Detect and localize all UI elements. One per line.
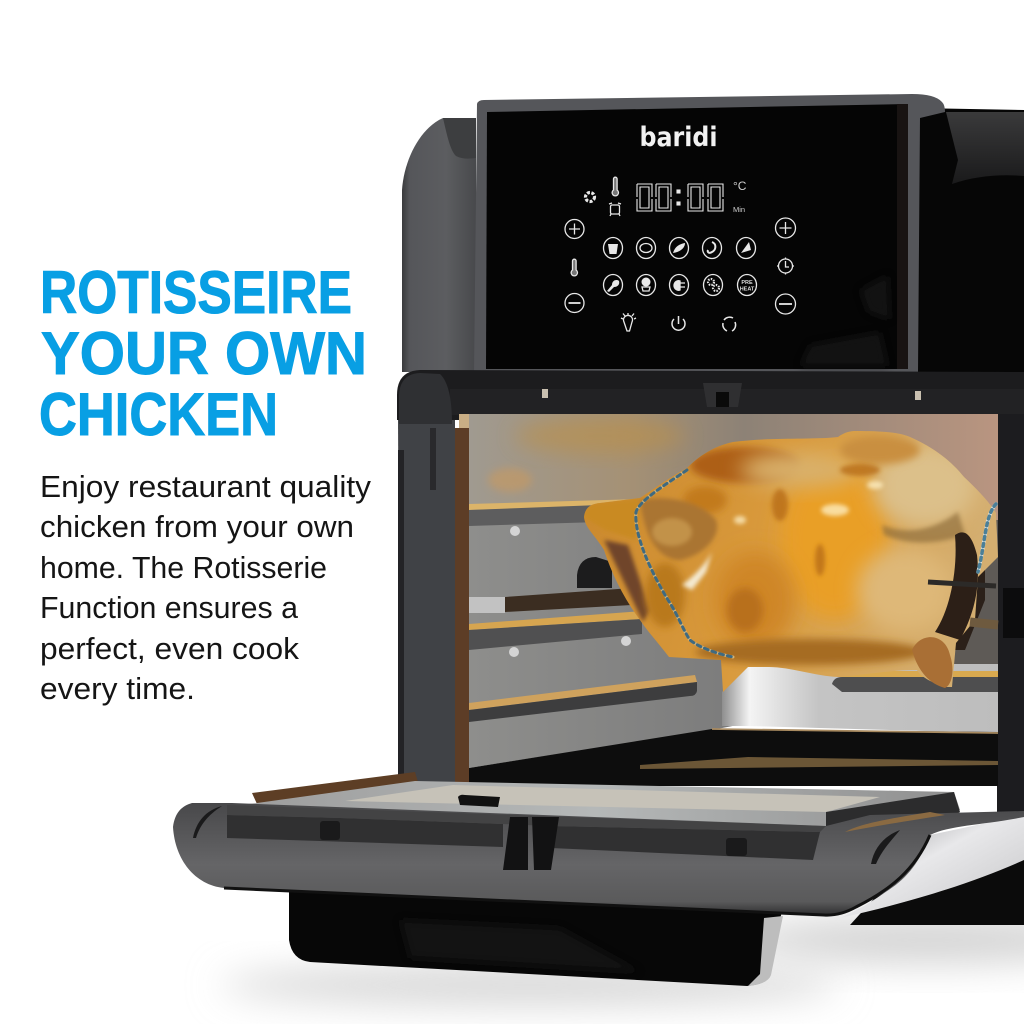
warm glow xyxy=(515,418,685,454)
panel edge strip xyxy=(897,104,908,369)
body text: Function ensures a xyxy=(40,591,298,625)
right side housing xyxy=(916,108,1024,372)
open door xyxy=(173,772,1024,915)
body text: perfect, even cook xyxy=(40,632,300,666)
rail three xyxy=(469,675,697,722)
light icon xyxy=(621,313,636,331)
chicken xyxy=(584,431,998,692)
band clips xyxy=(320,821,747,856)
left housing notch xyxy=(443,118,476,159)
rotate icon xyxy=(723,317,736,331)
handle silver edge xyxy=(748,916,783,986)
column edge xyxy=(398,450,404,780)
door glass highlight xyxy=(345,785,880,812)
oven interior xyxy=(469,414,998,790)
chicken drumstick xyxy=(912,637,952,688)
back wall xyxy=(722,664,998,733)
control panel glass xyxy=(486,104,908,369)
door dark band xyxy=(227,815,820,860)
timer digits xyxy=(637,184,723,211)
right column slot xyxy=(1003,588,1024,638)
right silver door panel xyxy=(840,815,1024,918)
glow spot xyxy=(488,468,532,492)
left plus button xyxy=(565,220,584,238)
right housing reflection xyxy=(946,112,1024,184)
door right highlight xyxy=(845,812,945,832)
left minus button xyxy=(565,294,584,312)
rail screws xyxy=(509,526,631,657)
beige corner tab xyxy=(459,414,470,428)
body text: chicken from your own xyxy=(40,510,354,544)
tray xyxy=(469,729,998,790)
body text: home. The Rotisserie xyxy=(40,551,327,585)
top frame bar xyxy=(397,370,1024,420)
handle black glass xyxy=(289,880,783,986)
unit labels: °C xyxy=(733,179,747,193)
left thermometer xyxy=(571,259,578,276)
left side housing xyxy=(402,118,476,372)
door right edge piece xyxy=(826,792,960,830)
column groove xyxy=(430,428,436,490)
body text: Enjoy restaurant quality xyxy=(40,470,372,504)
preset row two: PRE xyxy=(741,280,753,286)
heading: ROTISSEIRE xyxy=(40,259,352,326)
column corner xyxy=(399,373,452,424)
door inner tray xyxy=(230,781,960,826)
center notch xyxy=(503,817,559,870)
oven door frame xyxy=(397,370,1024,814)
spit bar xyxy=(469,588,632,613)
door bottom edge xyxy=(224,835,930,915)
alarm icon xyxy=(609,203,621,216)
heading: CHICKEN xyxy=(39,381,278,448)
panel reflections xyxy=(800,275,890,366)
chicken body xyxy=(584,431,998,692)
right door column xyxy=(997,414,1024,814)
heading: YOUR OWN xyxy=(41,320,367,387)
fan icon xyxy=(586,192,594,202)
right underside shadow xyxy=(850,840,1024,925)
chicken leg back xyxy=(945,535,985,650)
power icon xyxy=(672,316,685,330)
chicken cavity xyxy=(935,532,978,640)
control panel frame xyxy=(474,94,945,372)
frame latch xyxy=(703,383,742,407)
chicken skin shading xyxy=(584,436,977,665)
motor knob xyxy=(577,557,612,588)
preset row one xyxy=(604,238,756,258)
brand logo: baridi xyxy=(640,122,718,153)
right door slot xyxy=(871,830,900,864)
unit labels: Min xyxy=(733,205,745,214)
heading xyxy=(39,259,367,448)
rail one xyxy=(469,499,640,526)
body text: every time. xyxy=(40,672,195,706)
far wall behind chicken xyxy=(954,520,998,664)
body text xyxy=(40,470,372,706)
right clock xyxy=(777,258,794,274)
frame pins xyxy=(542,389,921,400)
door upper ridge xyxy=(227,805,826,832)
skewer right xyxy=(928,582,998,625)
right plus button xyxy=(776,218,796,238)
right minus button xyxy=(776,294,796,314)
door front moulding xyxy=(173,803,1024,915)
lower handle xyxy=(289,880,783,986)
preset row two xyxy=(604,274,756,296)
air fryer upper body xyxy=(402,94,1024,372)
door handle clip xyxy=(458,795,500,807)
back rail xyxy=(832,671,998,692)
latch slot xyxy=(716,392,729,407)
brown door edge xyxy=(252,772,418,804)
upper wall xyxy=(469,414,998,524)
brown inner strip xyxy=(455,428,469,784)
handle reflection xyxy=(400,920,640,972)
left door slot xyxy=(193,806,222,838)
thermometer icon top xyxy=(612,177,619,196)
floor shadow xyxy=(220,916,1024,1005)
rail two xyxy=(469,611,642,650)
twine xyxy=(636,470,996,657)
unit labels xyxy=(733,179,747,214)
side wall xyxy=(469,522,732,768)
left door column xyxy=(398,420,455,782)
preset row two: HEAT xyxy=(740,286,755,292)
frame recess xyxy=(450,389,1024,415)
touch controls xyxy=(565,177,796,331)
